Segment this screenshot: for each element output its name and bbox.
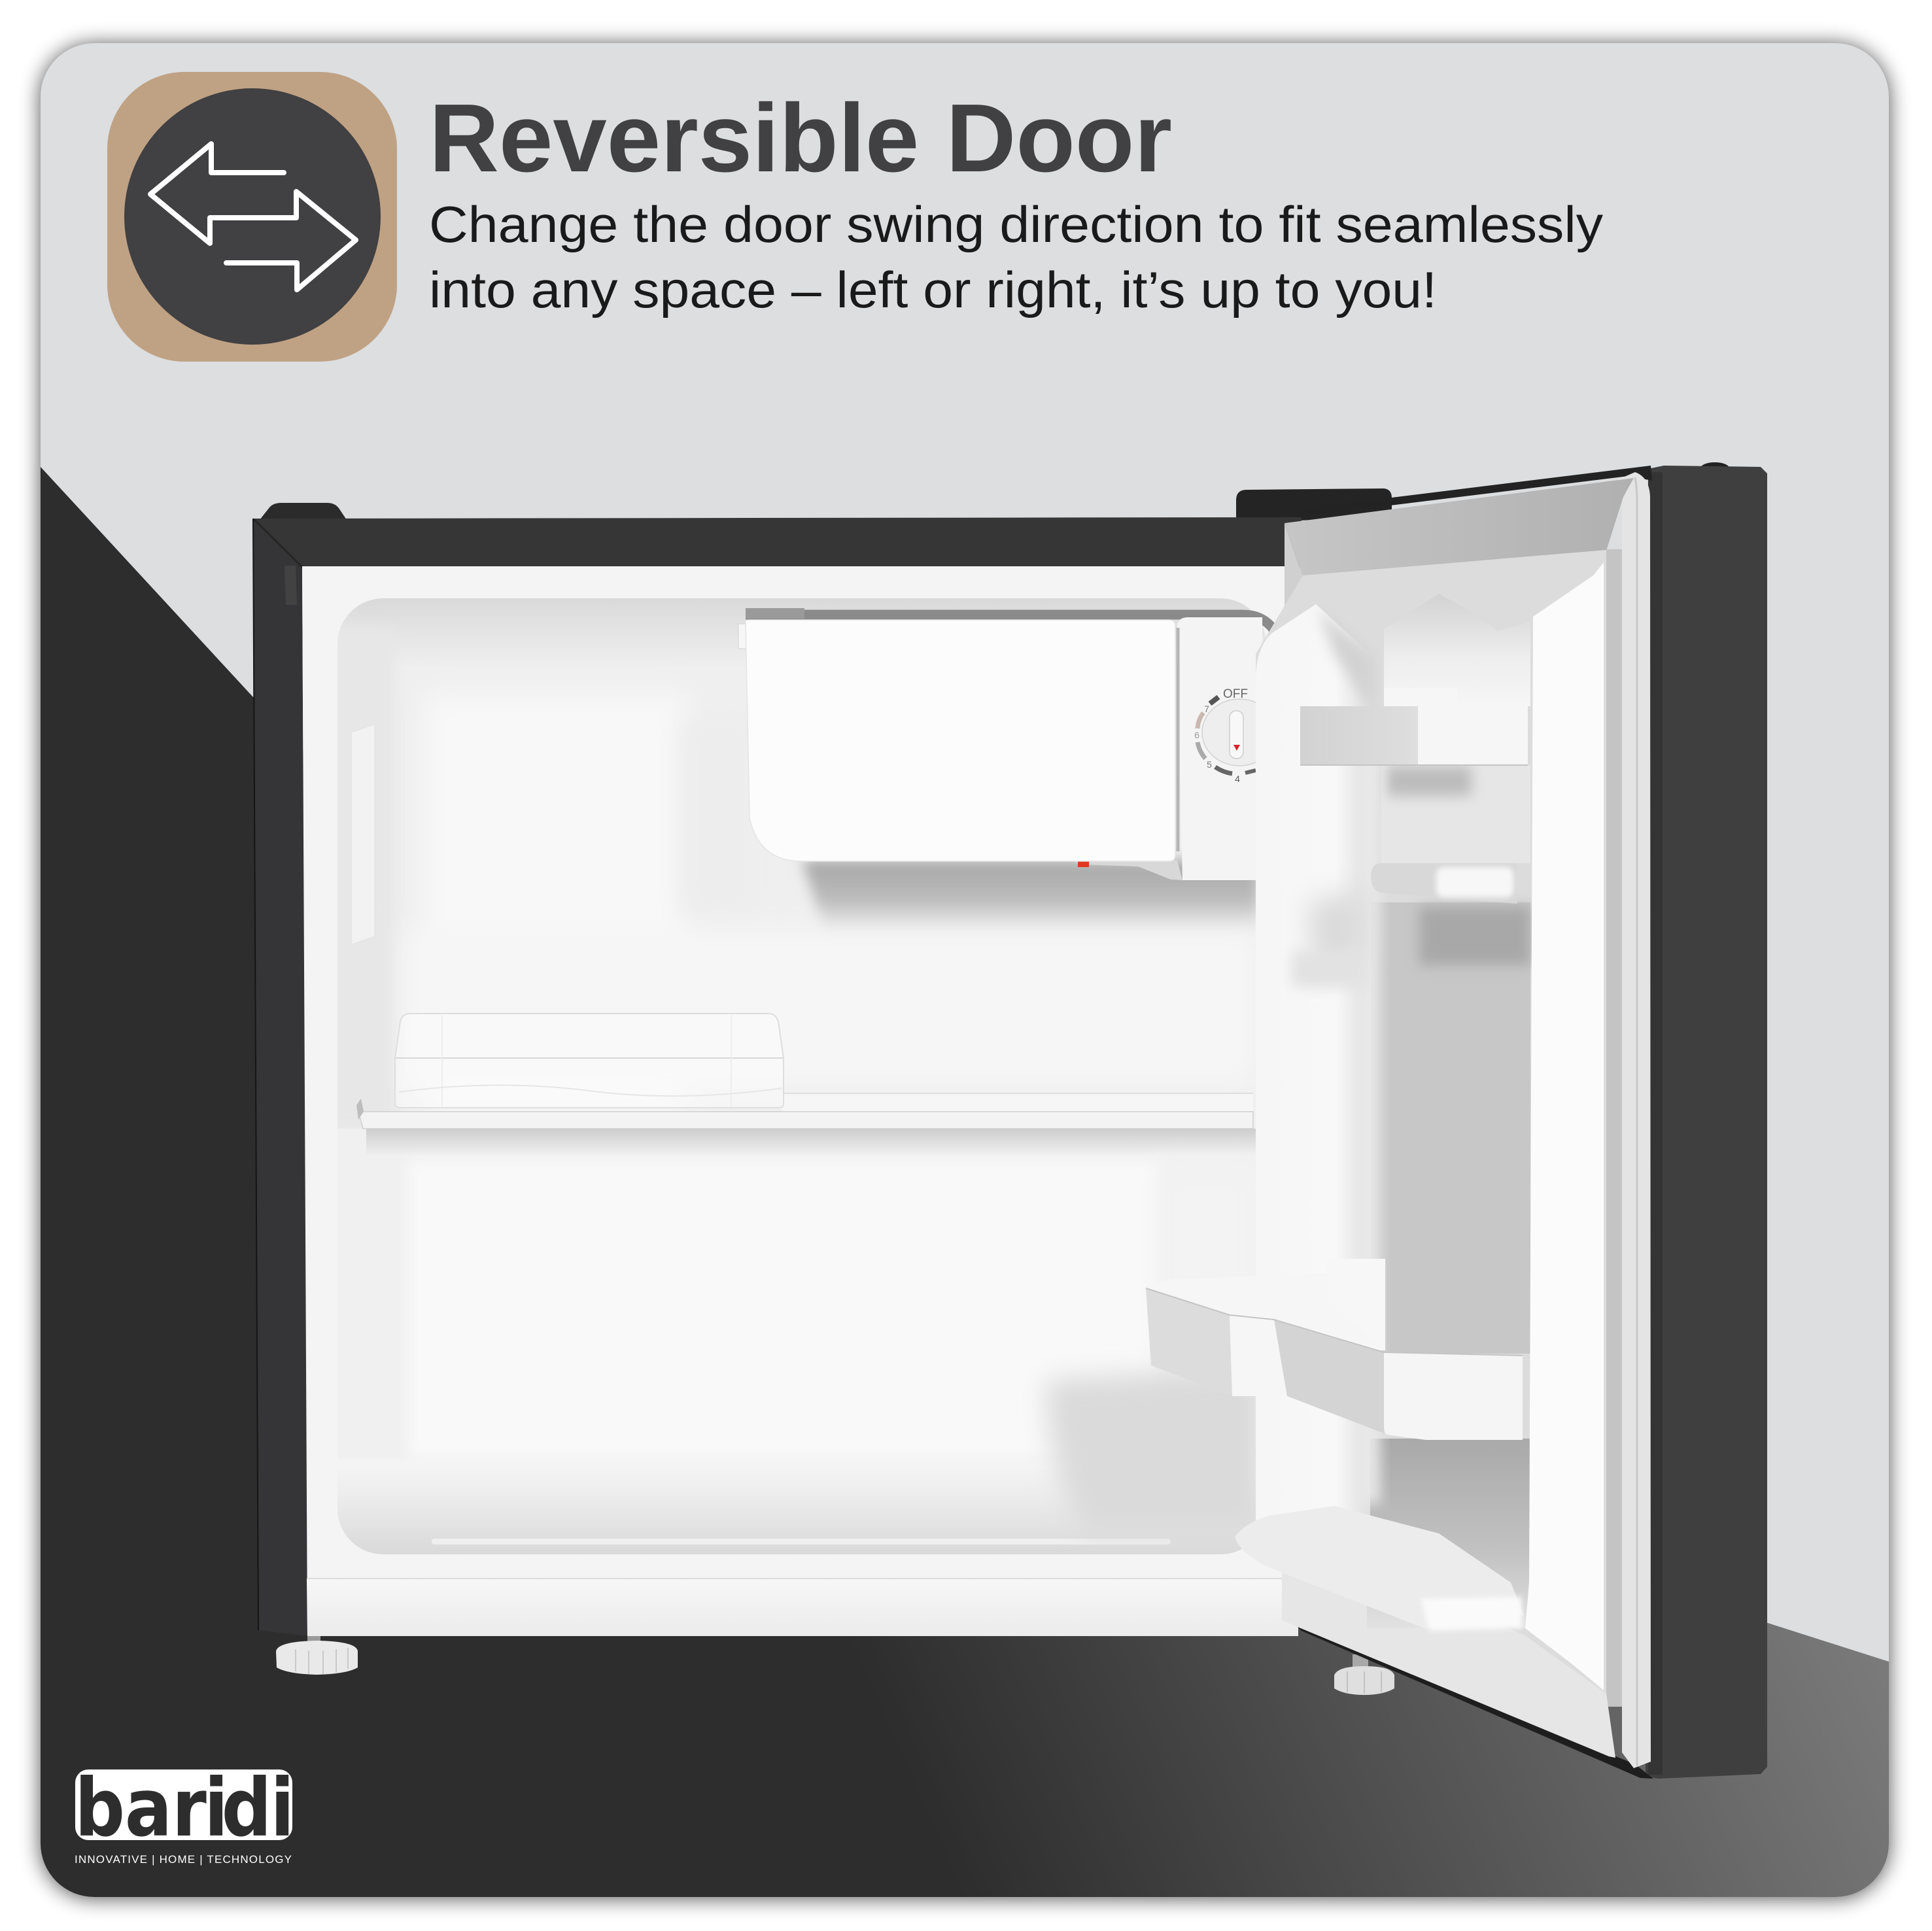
upper door shelf [1300,706,1528,765]
freezer cast shadow [802,860,1259,929]
black cabinet frame [253,517,1302,1636]
icon tile [107,72,397,362]
logo wordmark: baridi [75,1762,294,1855]
gasket top [1285,478,1634,577]
description text [429,196,1603,318]
title: Reversible Door [429,84,1172,192]
glass tray [395,1014,784,1108]
cavity left wall [337,667,387,670]
door top black edge [1300,466,1652,517]
temperature dial: 7 [1204,704,1209,714]
fridge left foot [276,1635,358,1675]
freezer compartment underside [1073,861,1182,880]
right foot [1334,1654,1394,1695]
label sticker [351,724,375,945]
top right hinge block [1236,488,1392,523]
door shadow on cavity [1046,1367,1262,1533]
freezer rear pipe [746,615,1277,634]
temperature dial: 5 [1207,759,1212,770]
door bottom ledge [1235,1506,1524,1631]
baridi logo [75,1762,294,1866]
fridge [253,462,1767,1779]
temperature dial: 4 [1235,774,1240,784]
logo tagline: INNOVATIVE | HOME | TECHNOLOGY [75,1853,292,1866]
freezer hinge bracket [746,608,804,619]
control housing [1177,617,1262,880]
door bottom gasket [1282,1573,1615,1758]
icon: reversible door arrows [107,72,397,362]
top left hinge cap [260,503,347,520]
dark floor and diagonal wedge [41,467,1889,1897]
temperature dial: OFF [1223,687,1248,701]
icon circle [124,88,381,345]
door bottom black edge [1295,1624,1653,1779]
white front flange [302,566,1298,1636]
door right ridge [1525,562,1604,1690]
door assembly [1146,462,1767,1779]
freezer door [738,620,1178,861]
freezer indicator tab [1078,861,1089,867]
logo plate [75,1769,292,1840]
cavity ceiling shading [341,598,1266,642]
icon arrows [150,144,356,290]
middle door rail [1371,863,1517,904]
lower compartment back wall [327,1129,1275,1554]
temperature dial: 6 [1194,730,1199,740]
door liner [1256,550,1606,1694]
bottom front lip [307,1579,1298,1636]
door outer black panel [1646,462,1767,1779]
lower compartment floor [337,1511,1242,1554]
interior cavity [320,589,1275,1558]
lower door bin [1146,1259,1523,1440]
door seal strip [1604,472,1651,1768]
door left ridge [1256,604,1380,1537]
description text: into any space – left or right, it’s up to you! [429,261,1437,318]
shelf rear surface [782,1093,1253,1112]
glass shelf front [356,1099,1253,1129]
upper recess tab [1384,688,1457,706]
temperature dial [1194,687,1277,784]
inner recess [1367,594,1530,1628]
description text: Change the door swing direction to fit seamlessly [429,196,1603,253]
upper back wall panel [441,709,667,912]
